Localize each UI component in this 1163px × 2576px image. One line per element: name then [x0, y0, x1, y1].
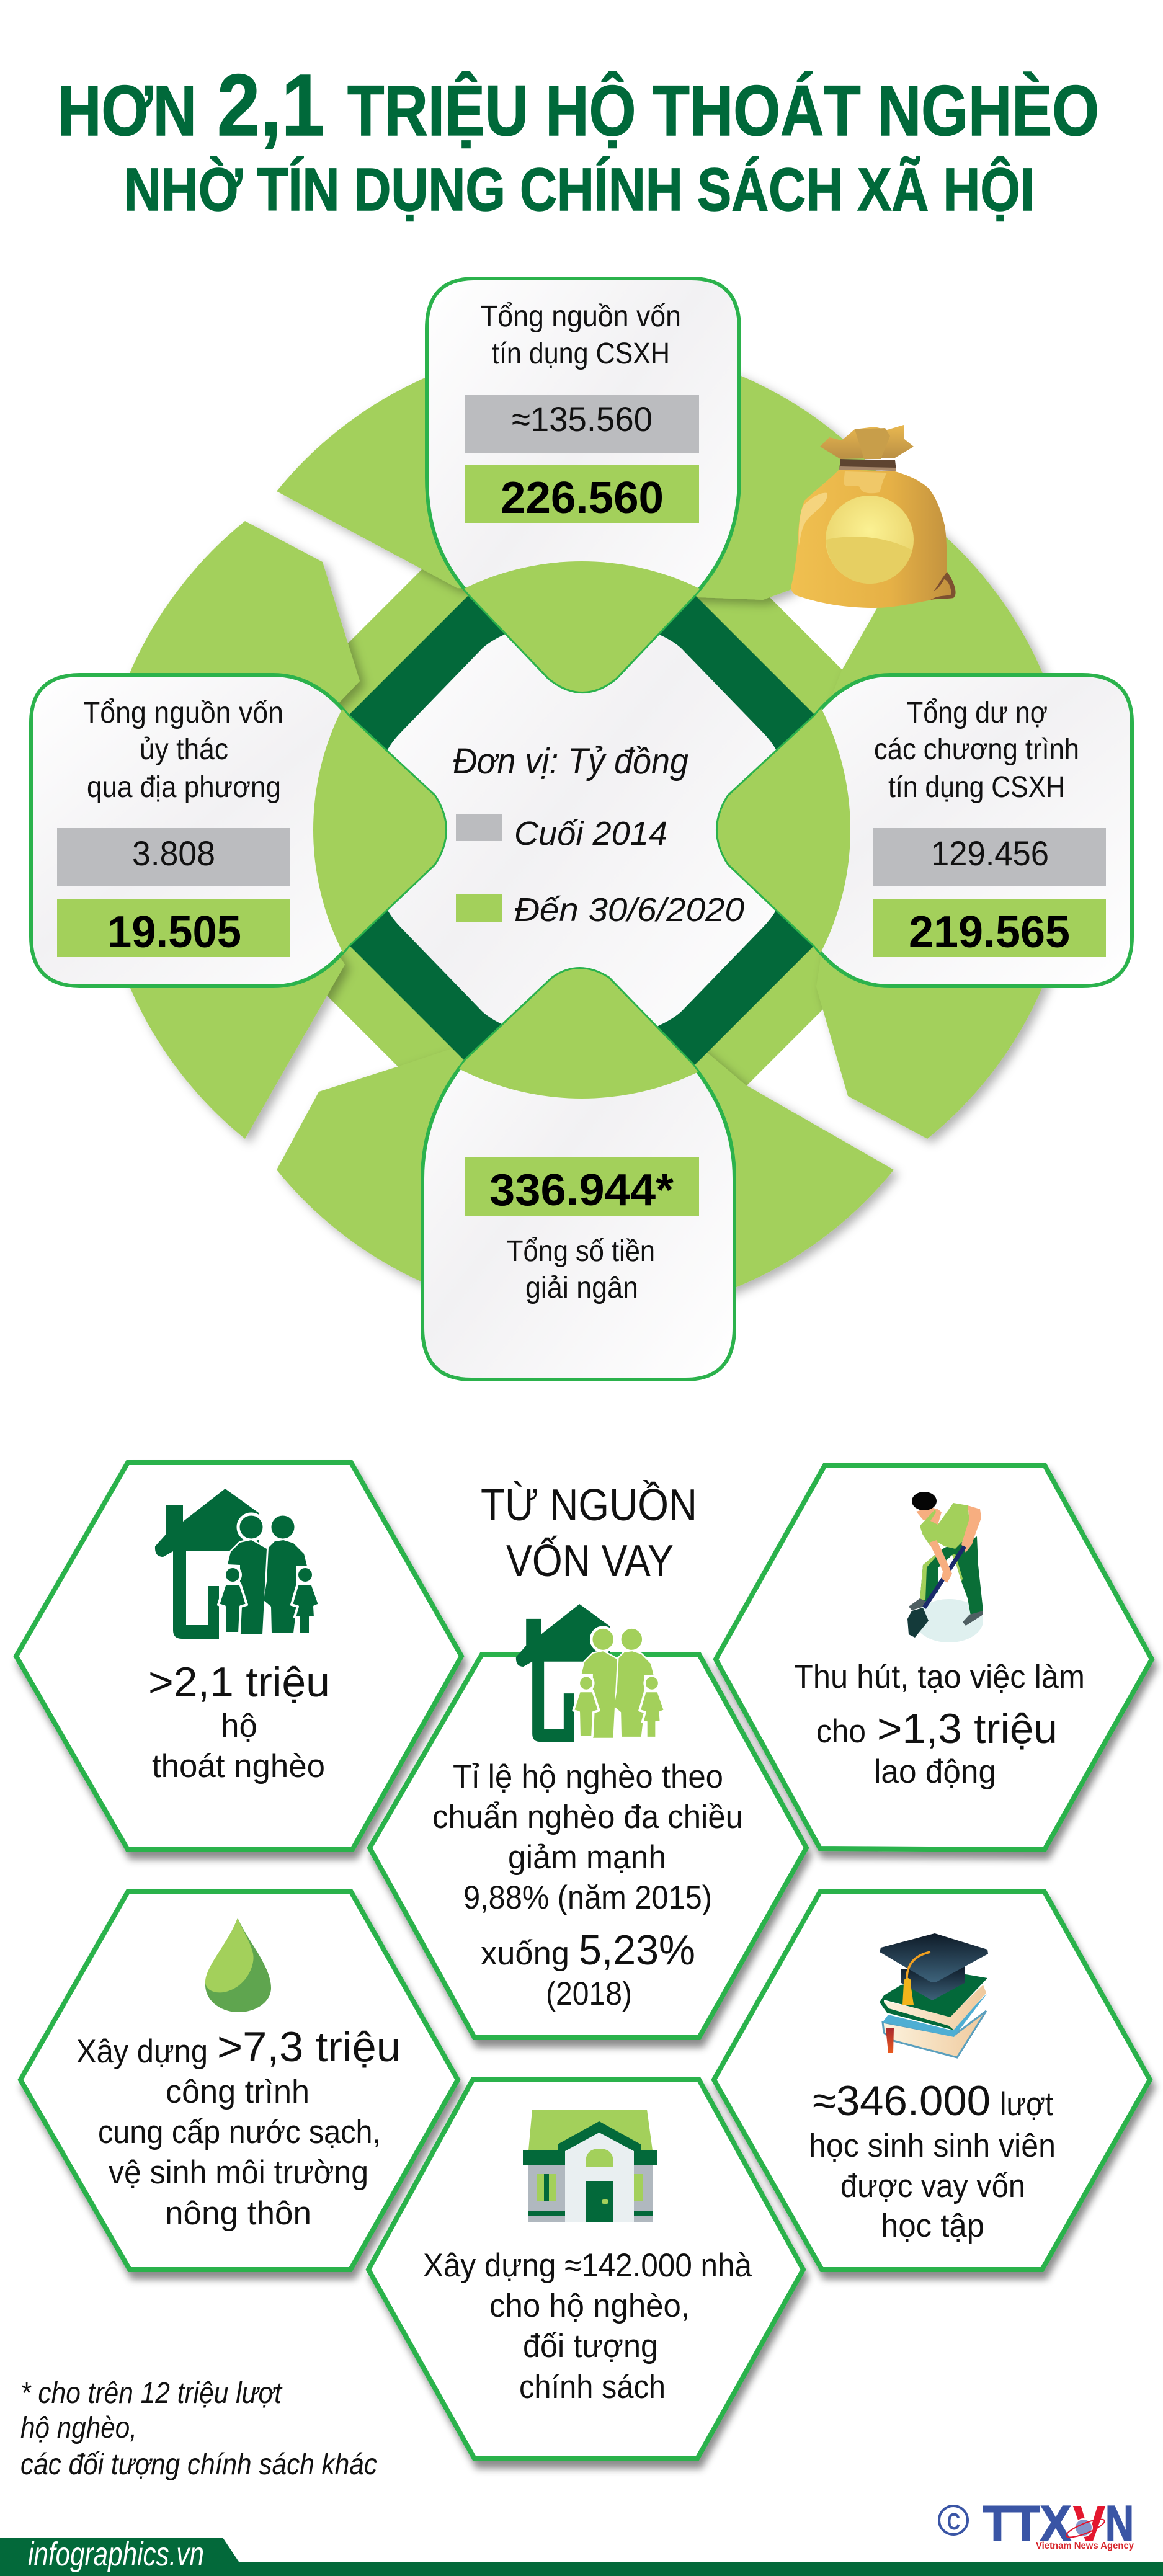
logo: TTXVN: V	[1073, 2496, 1105, 2552]
hexagon: poverty rate: 9,88% (năm 2015)	[463, 1879, 712, 1916]
hexagon: students: lượt	[1000, 2086, 1053, 2123]
panel: total credit capital	[427, 279, 739, 692]
title: NHỜ TÍN DỤNG CHÍNH SÁCH XÃ HỘI	[124, 156, 1035, 223]
logo: TTXVN: N	[1105, 2496, 1134, 2552]
panel: total credit capital: 226.560	[501, 473, 664, 523]
legend label 2014: Cuối 2014	[514, 815, 667, 852]
hexagon: jobs: cho	[816, 1713, 866, 1750]
panel: total disbursed: 336.944*	[489, 1165, 674, 1215]
heading: from loans	[481, 1480, 697, 1586]
panel: total credit capital: tín dụng CSXH	[492, 337, 670, 370]
hexagon: poverty rate	[370, 1604, 806, 2038]
hexagon: students: ≈346.000	[813, 2077, 991, 2124]
panel: total credit capital: Tổng nguồn vốn	[481, 300, 681, 333]
ring segment: right	[816, 521, 1075, 1139]
panel: entrusted local capital	[31, 675, 445, 986]
hexagon: housing	[368, 2080, 803, 2459]
heading: from loans: TỪ NGUỒN	[481, 1480, 697, 1530]
footnote: * cho trên 12 triệu lượt	[20, 2377, 282, 2410]
panel: total outstanding debt: Tổng dư nợ	[907, 697, 1048, 729]
hexagon: water: Xây dựng	[76, 2033, 208, 2070]
hexagon: poverty rate: (2018)	[546, 1976, 632, 2012]
hexagon: water	[20, 1892, 458, 2270]
icon: graduation cap and books	[880, 1933, 988, 2057]
icon: green house	[523, 2110, 657, 2222]
footer bar: infographics.vn	[28, 2536, 204, 2573]
ring diagram	[31, 279, 1132, 1379]
icon: house and family	[155, 1489, 319, 1639]
hexagon: water: nông thôn	[165, 2195, 311, 2232]
logo: TTXVN: TTX	[983, 2496, 1071, 2552]
hexagon: housing: Xây dựng ≈142.000 nhà	[423, 2247, 752, 2284]
hexagon: jobs: >1,3 triệu	[877, 1705, 1058, 1752]
hexagon: poor households	[16, 1463, 461, 1850]
hexagon: students: được vay vốn	[840, 2168, 1025, 2204]
footnote: các đối tượng chính sách khác	[20, 2448, 377, 2481]
panel: total outstanding debt: tín dụng CSXH	[888, 771, 1065, 804]
dark green diamond band	[234, 482, 930, 1178]
hexagon: poverty rate: xuống	[481, 1935, 569, 1972]
centre shape	[386, 595, 777, 1067]
logo: TTXVN	[939, 2496, 1134, 2552]
panel: total disbursed: giải ngân	[525, 1272, 638, 1304]
logo: TTXVN: Vietnam News Agency	[1036, 2541, 1134, 2551]
ring segment: left	[97, 521, 360, 1139]
hexagon: students	[714, 1892, 1150, 2270]
footnote	[20, 2377, 377, 2481]
icon: money bag	[791, 425, 956, 608]
hexagon: poor households: hộ	[221, 1708, 257, 1744]
hexagon: students: học sinh sinh viên	[809, 2128, 1056, 2164]
ring segment: bottom	[277, 1042, 894, 1317]
icon: house and family light	[516, 1604, 665, 1742]
hexagon: water: vệ sinh môi trường	[109, 2154, 368, 2191]
hexagon: jobs	[716, 1465, 1152, 1850]
panel: entrusted local capital: ủy thác	[140, 733, 228, 766]
legend swatch green	[456, 894, 502, 922]
hexagon: poverty rate: chuẩn nghèo đa chiều	[432, 1799, 743, 1835]
hexagon: housing: đối tượng	[523, 2328, 658, 2364]
hexagon: poverty rate: Tỉ lệ hộ nghèo theo	[453, 1758, 723, 1795]
legend	[453, 741, 744, 929]
panel: total outstanding debt: các chương trình	[874, 733, 1079, 766]
footer bar	[0, 2536, 1163, 2576]
icon: water drop	[205, 1918, 271, 2012]
hexagon: jobs: lao động	[874, 1754, 996, 1790]
hexagon: students: học tập	[881, 2208, 984, 2244]
panel: entrusted local capital: 3.808	[132, 834, 215, 873]
hexagon: water: công trình	[166, 2074, 310, 2110]
panel: total outstanding debt: 129.456	[931, 834, 1049, 873]
hexagon: poor households: >2,1 triệu	[148, 1659, 330, 1706]
panel: total disbursed: Tổng số tiền	[507, 1235, 655, 1268]
icon: worker with shovel	[907, 1492, 983, 1642]
panel: entrusted local capital: qua địa phương	[87, 771, 281, 804]
legend label 2020: Đến 30/6/2020	[514, 891, 744, 929]
logo: TTXVN: C	[947, 2509, 960, 2535]
hexagon: water: cung cấp nước sạch,	[98, 2114, 381, 2150]
hexagon: poverty rate: giảm mạnh	[508, 1839, 666, 1876]
title: 2,1	[217, 56, 324, 154]
footnote: hộ nghèo,	[20, 2412, 137, 2445]
hexagon: jobs: Thu hút, tạo việc làm	[794, 1659, 1085, 1695]
title	[58, 56, 1099, 223]
panel: entrusted local capital: 19.505	[107, 907, 241, 957]
panel: total disbursed	[422, 969, 734, 1379]
hexagon: housing: chính sách	[519, 2369, 666, 2405]
legend swatch grey	[456, 814, 502, 841]
panel: total outstanding debt	[718, 675, 1132, 986]
title: HƠN	[58, 71, 197, 151]
panel: total outstanding debt: 219.565	[909, 907, 1070, 957]
hexagon: water: >7,3 triệu	[217, 2023, 401, 2070]
legend unit: Đơn vị: Tỷ đồng	[453, 741, 688, 782]
ring segment: top	[277, 344, 894, 600]
hexagon: poverty rate: 5,23%	[579, 1927, 695, 1974]
hexagon: poor households: thoát nghèo	[152, 1748, 325, 1785]
hexagon: housing: cho hộ nghèo,	[489, 2288, 690, 2324]
light green diamond band	[161, 409, 1002, 1250]
panel: total credit capital: ≈135.560	[512, 399, 653, 439]
panel: entrusted local capital: Tổng nguồn vốn	[83, 697, 283, 729]
heading: from loans: VỐN VAY	[506, 1535, 674, 1586]
